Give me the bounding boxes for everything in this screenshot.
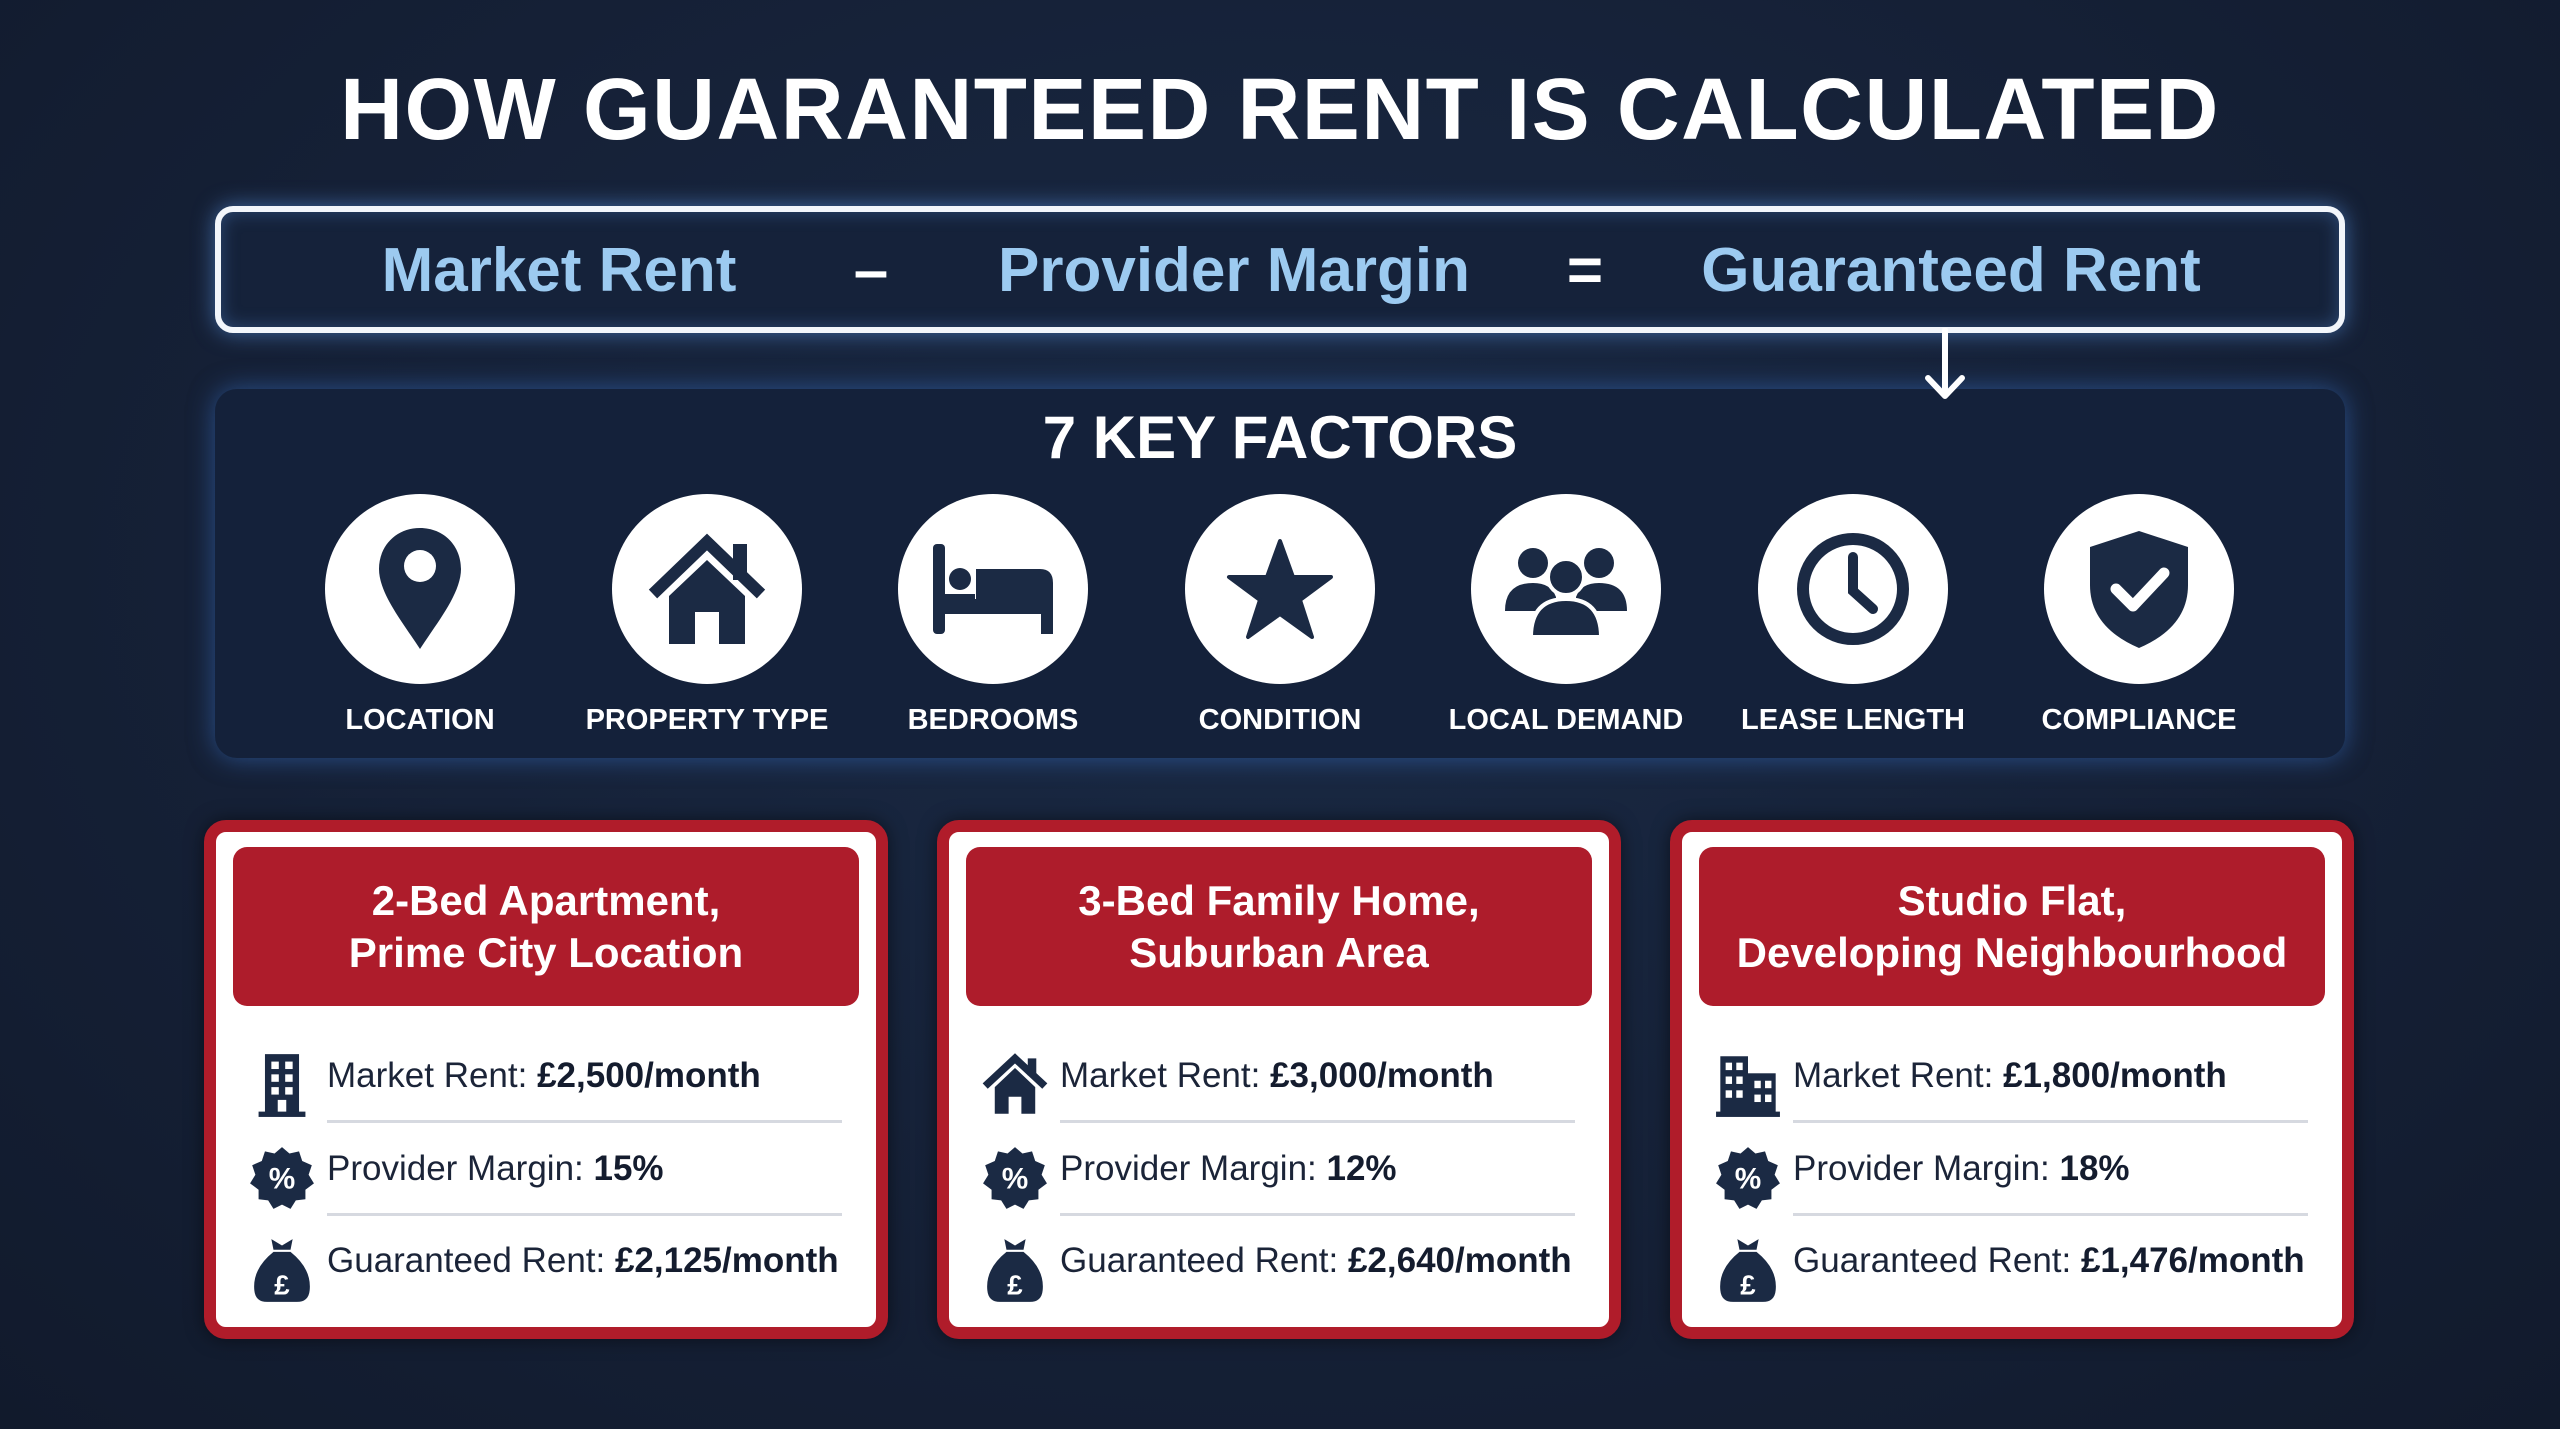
- factor: bedrooms: [898, 494, 1088, 736]
- row: guaranteed rent: £: [274, 1269, 290, 1300]
- row: guaranteed rent: [987, 1239, 1572, 1302]
- row: provider margin: Provider Margin: 18%: [1793, 1149, 2130, 1188]
- row: market rent: Market Rent: £2,500/month: [327, 1056, 761, 1095]
- row: guaranteed rent: [254, 1239, 839, 1302]
- factor: location: LOCATION: [345, 704, 495, 736]
- arrow down: [1925, 328, 1965, 399]
- formula box: [215, 206, 2345, 333]
- factor: local demand: LOCAL DEMAND: [1449, 704, 1683, 736]
- factor: property type: [586, 494, 828, 736]
- formula: provider margin: Provider Margin: [998, 236, 1470, 305]
- formula: equals: =: [1567, 236, 1603, 305]
- card header: [233, 847, 859, 1006]
- row: guaranteed rent: Guaranteed Rent: £2,125/month: [327, 1241, 839, 1280]
- factor: lease length: [1741, 494, 1965, 736]
- row: market rent: [258, 1054, 761, 1117]
- card header: [1699, 847, 2325, 1006]
- card header: Prime City Location: [349, 929, 743, 976]
- factor: compliance: [2042, 494, 2236, 736]
- formula: guaranteed rent: Guaranteed Rent: [1701, 236, 2201, 305]
- row: guaranteed rent: [1720, 1239, 2305, 1302]
- row: guaranteed rent: £: [1007, 1269, 1023, 1300]
- row: provider margin: [1716, 1147, 2130, 1209]
- factor: compliance: COMPLIANCE: [2042, 704, 2236, 736]
- card header: [966, 847, 1592, 1006]
- row: market rent: Market Rent: £1,800/month: [1793, 1056, 2227, 1095]
- row: guaranteed rent: £: [1740, 1269, 1756, 1300]
- card: 2-bed apartment: [204, 820, 888, 1339]
- factor: condition: [1185, 494, 1375, 736]
- card: 3-bed family home: [937, 820, 1621, 1339]
- row: guaranteed rent: Guaranteed Rent: £1,476/month: [1793, 1241, 2305, 1280]
- factor: local demand: [1449, 494, 1683, 736]
- card header: 2-Bed Apartment,: [372, 877, 720, 924]
- title: HOW GUARANTEED RENT IS CALCULATED: [340, 61, 2220, 158]
- factor: bedrooms: BEDROOMS: [908, 704, 1078, 736]
- row: provider margin: [983, 1147, 1397, 1209]
- factor: location: [325, 494, 515, 736]
- card header: Studio Flat,: [1898, 877, 2126, 924]
- row: guaranteed rent: Guaranteed Rent: £2,640/month: [1060, 1241, 1572, 1280]
- factor: condition: CONDITION: [1199, 704, 1361, 736]
- row: provider margin: Provider Margin: 12%: [1060, 1149, 1397, 1188]
- row: provider margin: [250, 1147, 664, 1209]
- card header: 3-Bed Family Home,: [1078, 877, 1480, 924]
- factor: lease length: LEASE LENGTH: [1741, 704, 1965, 736]
- row: provider margin: %: [269, 1163, 295, 1196]
- row: provider margin: Provider Margin: 15%: [327, 1149, 664, 1188]
- card: studio flat: [1670, 820, 2354, 1339]
- factors heading: 7 KEY FACTORS: [1043, 404, 1517, 471]
- card header: Developing Neighbourhood: [1737, 929, 2287, 976]
- row: provider margin: %: [1002, 1163, 1028, 1196]
- row: provider margin: %: [1735, 1163, 1761, 1196]
- row: market rent: Market Rent: £3,000/month: [1060, 1056, 1494, 1095]
- card header: Suburban Area: [1129, 929, 1429, 976]
- panel: 7 key factors: [215, 389, 2345, 758]
- factor: property type: PROPERTY TYPE: [586, 704, 828, 736]
- formula: market rent: Market Rent: [382, 236, 736, 305]
- row: market rent: [982, 1053, 1494, 1114]
- formula: minus: –: [854, 236, 888, 305]
- row: market rent: [1716, 1056, 2227, 1117]
